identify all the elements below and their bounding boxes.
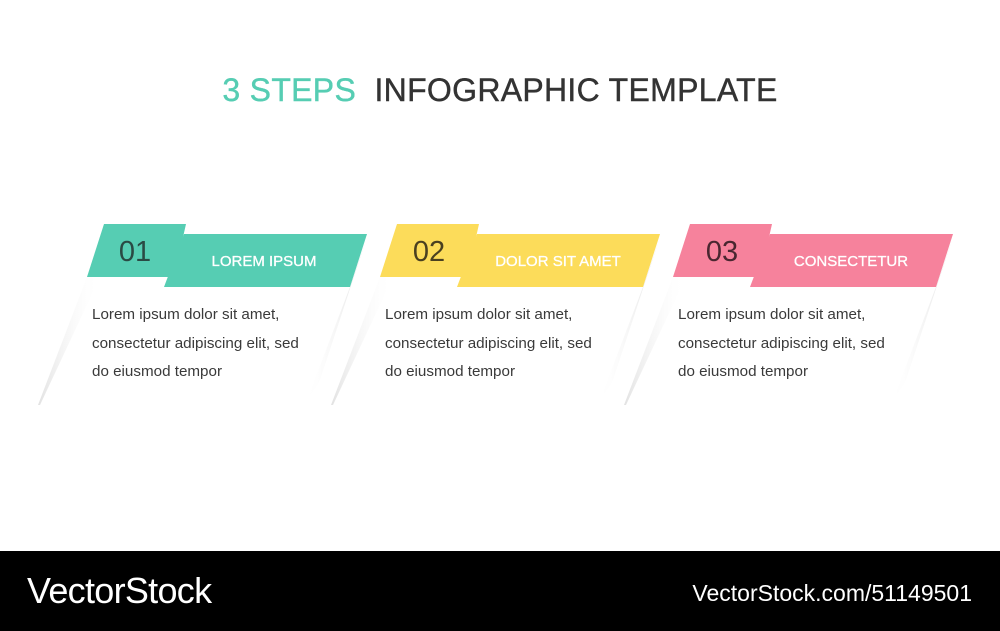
text 3: consectetur adipiscing elit, sed [678,334,885,352]
step 3: 03 [706,236,738,268]
text 3 [678,306,885,380]
step 2: 02 [413,236,445,268]
title: 3 STEPS INFOGRAPHIC TEMPLATE [222,72,778,108]
text 1: do eiusmod tempor [92,363,222,380]
text 3: do eiusmod tempor [678,363,808,380]
step 3 [624,224,953,405]
footer logo: VectorStock [27,570,211,611]
step 1: 01 [119,236,151,268]
step 2 [331,224,660,405]
footer bar [0,551,1000,631]
text 2: do eiusmod tempor [385,363,515,380]
step 2: DOLOR SIT AMET [495,253,621,270]
text 1 [92,306,299,380]
text 1: consectetur adipiscing elit, sed [92,334,299,352]
text 2 [385,306,592,380]
step 1: LOREM IPSUM [211,253,317,270]
text 1: Lorem ipsum dolor sit amet, [92,306,279,323]
footer id: VectorStock.com/51149501 [692,580,972,606]
text 2: Lorem ipsum dolor sit amet, [385,306,572,323]
step 1 [38,224,367,405]
step 3: CONSECTETUR [794,253,908,270]
text 2: consectetur adipiscing elit, sed [385,334,592,352]
text 3: Lorem ipsum dolor sit amet, [678,306,865,323]
